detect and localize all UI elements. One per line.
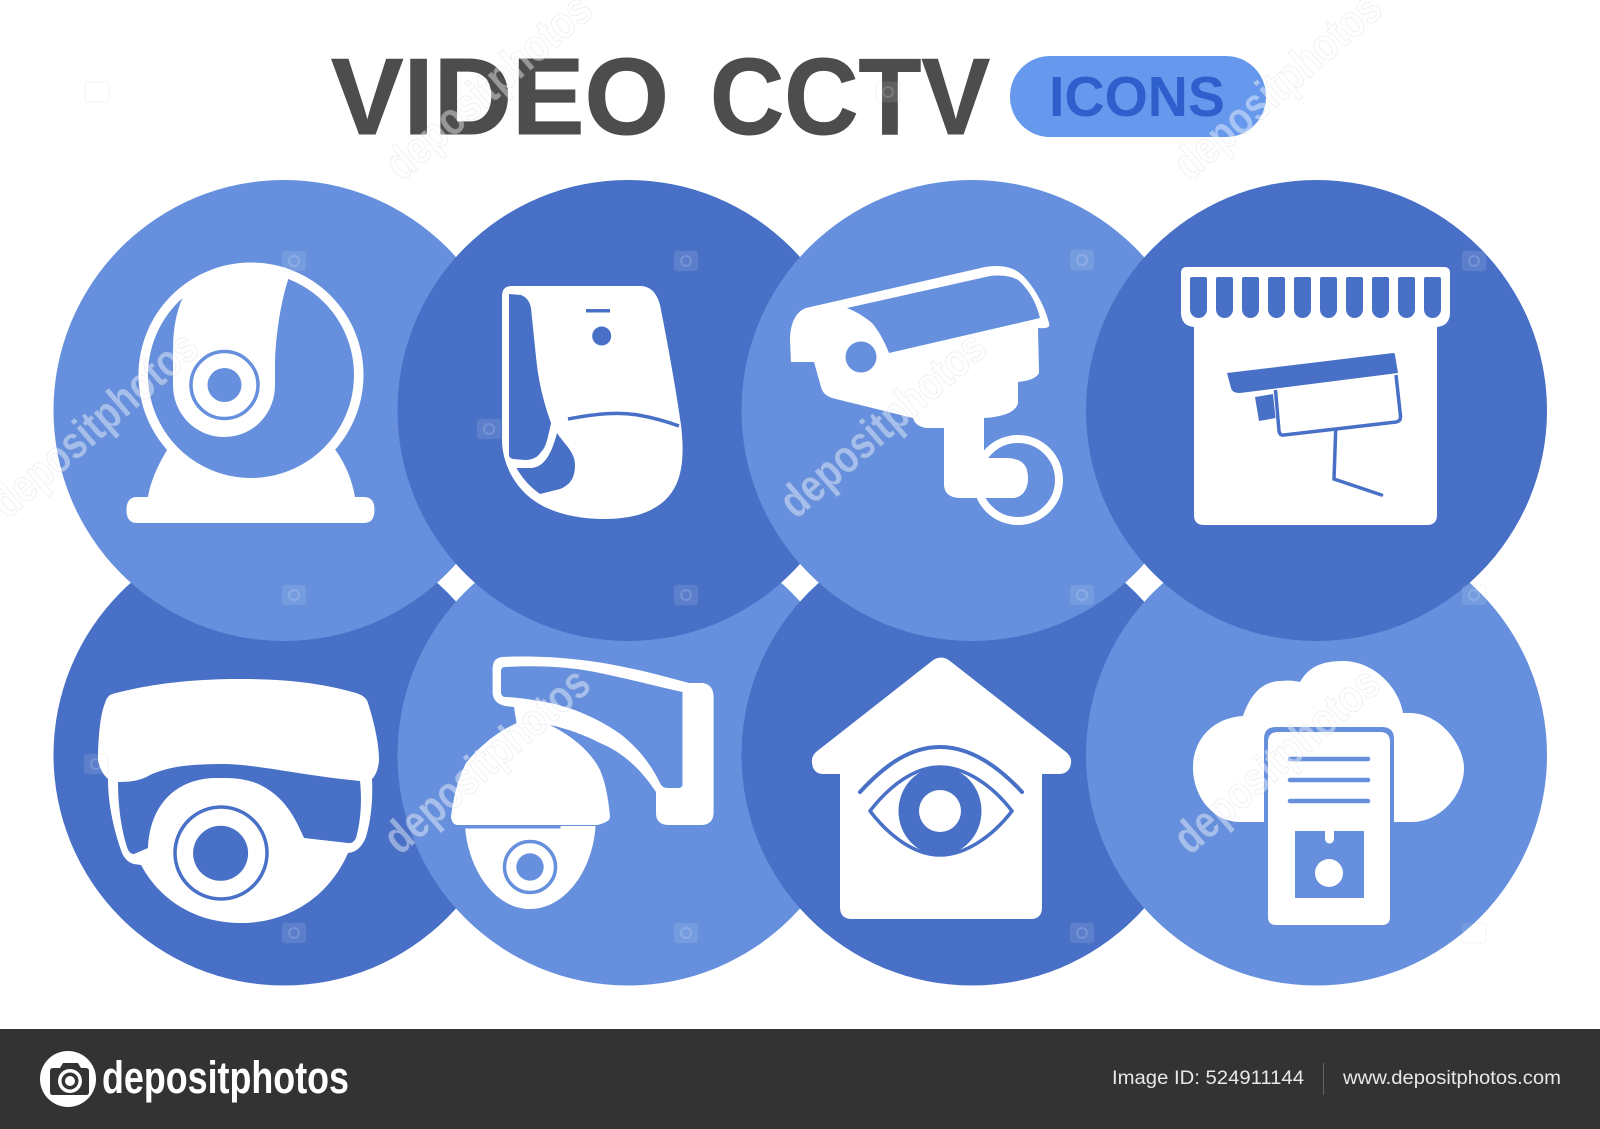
icon: bullet security camera (790, 266, 1059, 521)
watermark: depositphotos text overlays: depositphotos (372, 656, 600, 864)
footer image id: Image ID: 524911144 (1112, 1067, 1304, 1089)
icon: cloud server (1193, 661, 1464, 925)
icon: dome camera (98, 679, 379, 923)
watermark: depositphotos text overlays: depositphotos (1162, 656, 1390, 864)
icon: ptz camera on arm (451, 657, 714, 909)
server panel (1295, 831, 1364, 898)
watermark: depositphotos text overlays (0, 0, 1391, 864)
footer bar (0, 1029, 1600, 1129)
title text: video cctv: CCTV (710, 36, 990, 158)
title text: video cctv (331, 36, 990, 158)
title text: video cctv: VIDEO (331, 36, 669, 158)
dome lower (465, 826, 596, 909)
footer url: www.depositphotos.com (1342, 1067, 1561, 1089)
badge: icons pill: ICONS (1049, 65, 1225, 129)
icon: webcam (126, 262, 374, 523)
footer divider (1323, 1063, 1324, 1095)
dome upper (451, 723, 610, 825)
watermark: small camera marks (84, 82, 1486, 943)
icon: house with eye (812, 658, 1071, 919)
wall arm (493, 657, 714, 825)
small camera (1227, 353, 1401, 495)
title (331, 36, 1266, 158)
watermark: depositphotos text overlays: depositphotos (768, 320, 996, 528)
icon grid: top row circles (54, 180, 1547, 641)
footer logo wordmark: depositphotos (102, 1052, 349, 1103)
badge: icons pill (1010, 56, 1266, 137)
awning stripes (1190, 277, 1441, 318)
server lines (1290, 759, 1368, 801)
icon: shop with camera (1181, 267, 1450, 525)
footer logo icon (40, 1051, 96, 1107)
icon grid: bottom row circles (54, 524, 1547, 986)
icon: motion sensor (502, 286, 683, 519)
